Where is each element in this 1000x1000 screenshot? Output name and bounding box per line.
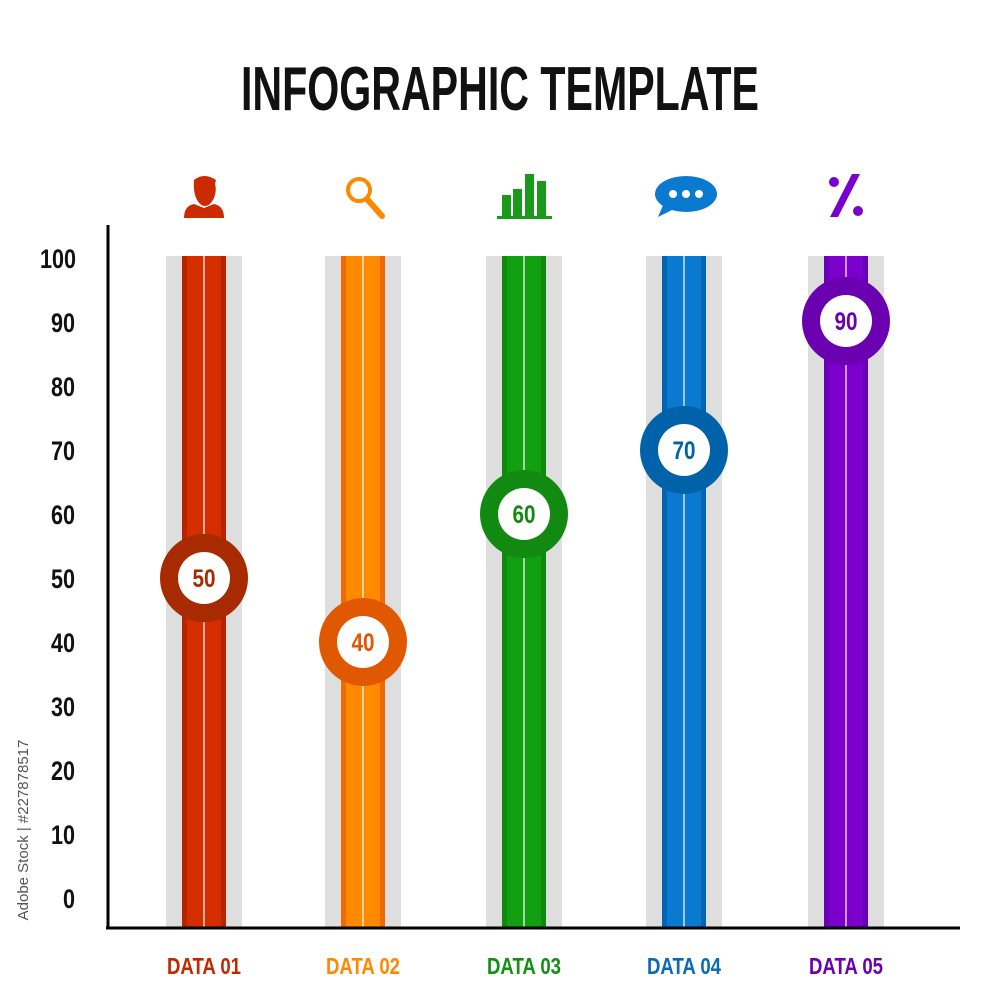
icon: speech bubble [655,176,717,217]
category labels: DATA 01 [167,953,241,979]
marker 50 [160,534,248,622]
y axis labels [40,244,76,914]
marker 40: 40 [352,629,374,657]
icon: person [184,176,224,218]
marker 40 [319,598,407,686]
marker 70: 70 [672,437,696,465]
bar 5 [802,256,890,928]
marker 90 [802,277,890,365]
y axis labels: 60 [51,500,75,530]
marker 60: 60 [512,501,536,529]
bar 4 [640,256,728,928]
marker 70 [640,406,728,494]
title: INFOGRAPHIC TEMPLATE [241,55,759,124]
watermark id: Adobe Stock | #227878517 [15,740,32,920]
category labels: DATA 02 [326,953,400,979]
category labels: DATA 05 [809,953,883,979]
marker 90: 90 [834,308,858,336]
y axis labels: 70 [51,436,75,466]
y axis labels: 0 [63,884,75,914]
bar 3 [480,256,568,928]
y axis labels: 80 [51,372,75,402]
category labels [167,953,883,979]
marker 60 [480,470,568,558]
y axis labels: 20 [51,756,75,786]
category labels: DATA 04 [647,953,721,979]
marker 50: 50 [192,565,216,593]
bar 1 [160,256,248,928]
y axis labels: 50 [51,564,75,594]
y axis labels: 100 [40,244,76,274]
y axis labels: 90 [51,308,75,338]
icon: percent [829,174,863,217]
category labels: DATA 03 [487,953,561,979]
y axis labels: 10 [51,820,75,850]
axes [106,225,960,929]
bar 2 [319,256,407,928]
y axis labels: 30 [51,692,75,722]
icon: magnifier [348,179,382,216]
icon: bar chart [497,174,552,219]
y axis labels: 40 [51,628,75,658]
